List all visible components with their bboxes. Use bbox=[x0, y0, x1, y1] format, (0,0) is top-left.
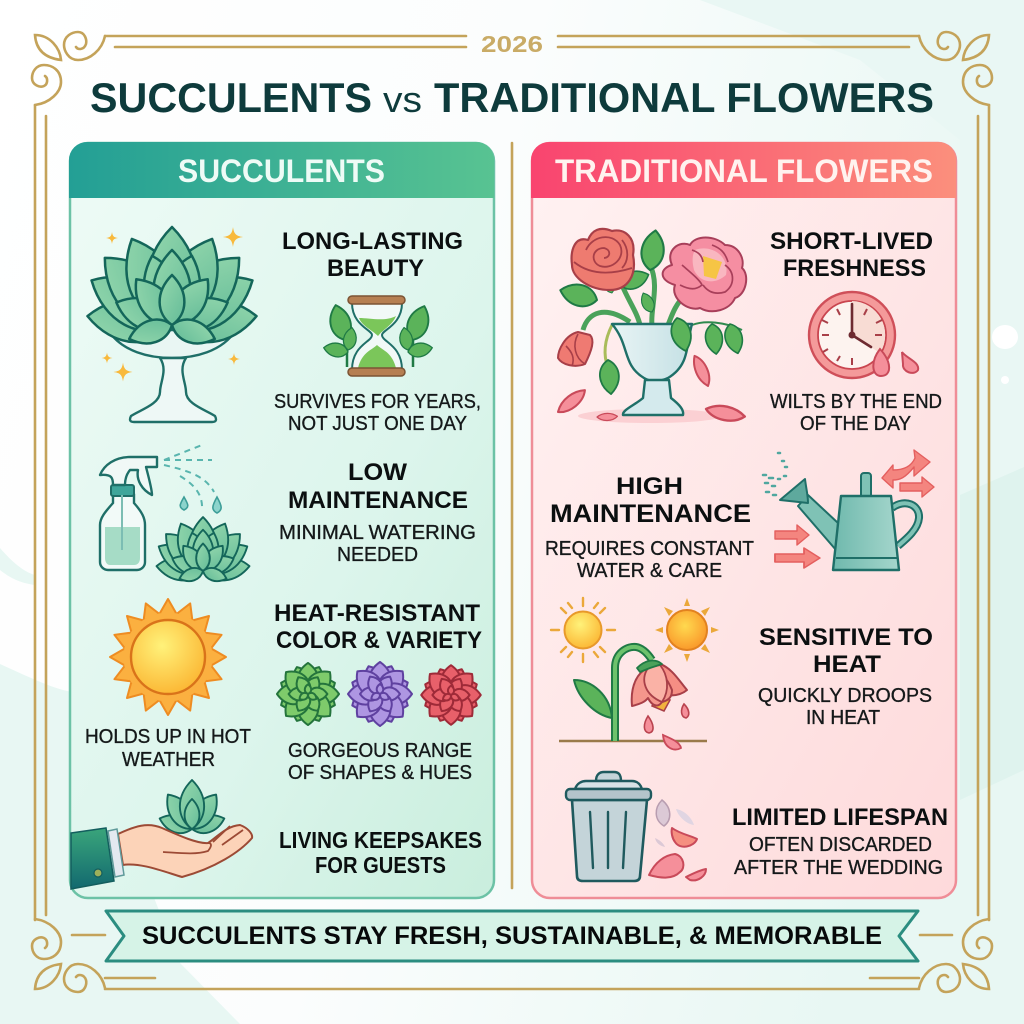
text: survives for years: SURVIVES FOR YEARS, bbox=[274, 391, 481, 413]
text: quickly droops in heat: IN HEAT bbox=[806, 707, 880, 729]
text: living keepsakes: LIVING KEEPSAKES bbox=[279, 827, 482, 853]
heading: short-lived freshness: FRESHNESS bbox=[783, 255, 926, 282]
heading: limited lifespan: LIMITED LIFESPAN bbox=[732, 804, 948, 831]
heading: sensitive to heat: SENSITIVE TO bbox=[759, 624, 933, 651]
banner ribbon bbox=[106, 911, 918, 961]
succulents panel body bbox=[70, 143, 494, 898]
heading: heat-resistant color and variety: HEAT-RESISTANT bbox=[274, 600, 480, 627]
icon: wilting flower between two suns bbox=[551, 598, 719, 749]
icon: succulent in pedestal bowl bbox=[80, 227, 264, 422]
title: vs bbox=[383, 79, 422, 120]
flowers panel header bbox=[531, 142, 956, 198]
text: survives for years bbox=[274, 391, 481, 435]
heading: high maintenance: HIGH bbox=[616, 473, 683, 500]
heading: low maintenance bbox=[288, 459, 468, 514]
text: gorgeous range bbox=[288, 740, 472, 784]
text: requires constant water and care: WATER & CARE bbox=[577, 560, 722, 582]
text: often discarded: OFTEN DISCARDED bbox=[749, 834, 932, 856]
banner text: SUCCULENTS STAY FRESH, SUSTAINABLE, & MEMORABLE bbox=[142, 922, 882, 950]
text: living keepsakes: FOR GUESTS bbox=[315, 852, 446, 878]
heading: long-lasting beauty: LONG-LASTING bbox=[282, 228, 463, 255]
heading: short-lived freshness: SHORT-LIVED bbox=[770, 228, 933, 255]
text: survives for years: NOT JUST ONE DAY bbox=[288, 413, 467, 435]
fallen petals bbox=[554, 354, 746, 428]
icon: spray bottle and small succulent bbox=[100, 445, 253, 584]
text: often discarded bbox=[734, 834, 943, 879]
title bbox=[90, 74, 934, 121]
title: TRADITIONAL FLOWERS bbox=[434, 74, 934, 121]
icon: wilting flowers in vase bbox=[554, 229, 746, 428]
text: wilts by the end of the day: OF THE DAY bbox=[800, 413, 911, 435]
heading: short-lived freshness bbox=[770, 228, 933, 282]
heading: low maintenance: MAINTENANCE bbox=[288, 487, 468, 514]
text: minimal watering bbox=[279, 522, 476, 566]
heading: long-lasting beauty bbox=[282, 228, 463, 282]
text: often discarded: AFTER THE WEDDING bbox=[734, 857, 943, 879]
icon: peony bbox=[663, 238, 746, 311]
icon: drooping tulip bbox=[558, 332, 592, 366]
heading: high maintenance: MAINTENANCE bbox=[550, 500, 751, 528]
heading: sensitive to heat: HEAT bbox=[813, 651, 881, 678]
text: holds up in hot weather: HOLDS UP IN HOT bbox=[85, 726, 251, 748]
text: quickly droops in heat: QUICKLY DROOPS bbox=[758, 685, 932, 707]
text: gorgeous range: OF SHAPES & HUES bbox=[288, 762, 472, 784]
bottom banner bbox=[106, 911, 918, 961]
heading: heat-resistant color and variety: COLOR & VARIETY bbox=[276, 627, 482, 654]
icon: clock with drips bbox=[809, 292, 918, 378]
text: wilts by the end of the day bbox=[770, 391, 942, 435]
text: holds up in hot weather bbox=[85, 726, 251, 771]
title: SUCCULENTS bbox=[90, 74, 372, 121]
icon: trash can with petals bbox=[566, 772, 706, 881]
icon: rose bbox=[572, 229, 634, 290]
heading: sensitive to heat bbox=[759, 624, 933, 678]
heading: low maintenance: LOW bbox=[348, 459, 407, 486]
year label: 2026 bbox=[481, 31, 543, 57]
icon: hand holding succulent bbox=[71, 780, 252, 889]
icon: hourglass with leaves bbox=[322, 296, 434, 376]
text: requires constant water and care bbox=[545, 538, 754, 582]
text: quickly droops in heat bbox=[758, 685, 932, 729]
icon: sun bbox=[110, 599, 226, 715]
flowers panel body bbox=[532, 143, 956, 898]
heading: heat-resistant color and variety bbox=[274, 600, 482, 654]
panel: traditional flowers bbox=[531, 142, 956, 898]
text: minimal watering: NEEDED bbox=[337, 544, 418, 566]
succulents heading: SUCCULENTS bbox=[178, 153, 385, 189]
icon: watering can with arrows bbox=[763, 450, 934, 570]
panel: succulents bbox=[69, 142, 494, 898]
icon: three colored succulents bbox=[277, 662, 481, 726]
text: requires constant water and care: REQUIRES CONSTANT bbox=[545, 538, 754, 560]
flowers heading: TRADITIONAL FLOWERS bbox=[555, 153, 933, 189]
text: wilts by the end of the day: WILTS BY THE END bbox=[770, 391, 942, 413]
text: gorgeous range: GORGEOUS RANGE bbox=[288, 740, 472, 762]
succulents panel header bbox=[69, 142, 494, 198]
text: minimal watering: MINIMAL WATERING bbox=[279, 522, 476, 544]
text: living keepsakes bbox=[279, 827, 482, 878]
heading: high maintenance bbox=[550, 473, 751, 528]
text: holds up in hot weather: WEATHER bbox=[122, 749, 215, 771]
heading: long-lasting beauty: BEAUTY bbox=[327, 255, 424, 282]
